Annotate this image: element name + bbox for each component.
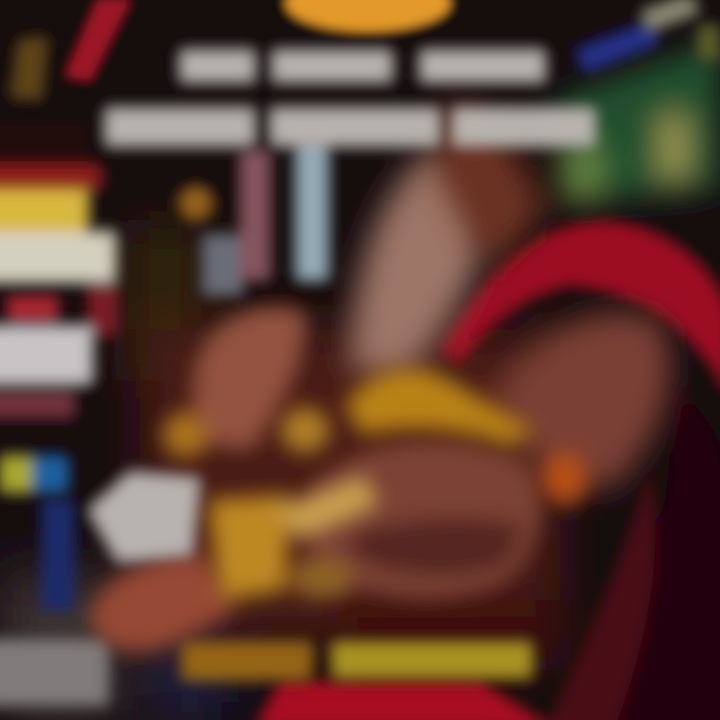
figure: forearm bbox=[490, 312, 671, 490]
background: red stripe top left bbox=[66, 0, 130, 80]
background: blue and pale banner bbox=[575, 0, 720, 72]
figure: lower hand bbox=[88, 307, 541, 652]
bottom banner: illegible gold text bbox=[182, 642, 532, 680]
background: gold tag top left bbox=[10, 36, 48, 100]
figure: raised hand bbox=[440, 106, 548, 270]
top glow: golden lamp bbox=[286, 0, 450, 31]
figure: beard bbox=[350, 150, 488, 375]
left column: slot machine bbox=[0, 120, 118, 705]
gold coins and jewellery bbox=[163, 369, 587, 600]
title: illegible blurred headline bbox=[105, 50, 595, 146]
dealer card: white panel bbox=[88, 472, 200, 562]
figure: red robe bbox=[255, 222, 720, 720]
background: warm dark centre bbox=[0, 220, 570, 720]
background: pale vertical columns bbox=[179, 140, 328, 295]
background: green storefront bbox=[555, 40, 720, 205]
